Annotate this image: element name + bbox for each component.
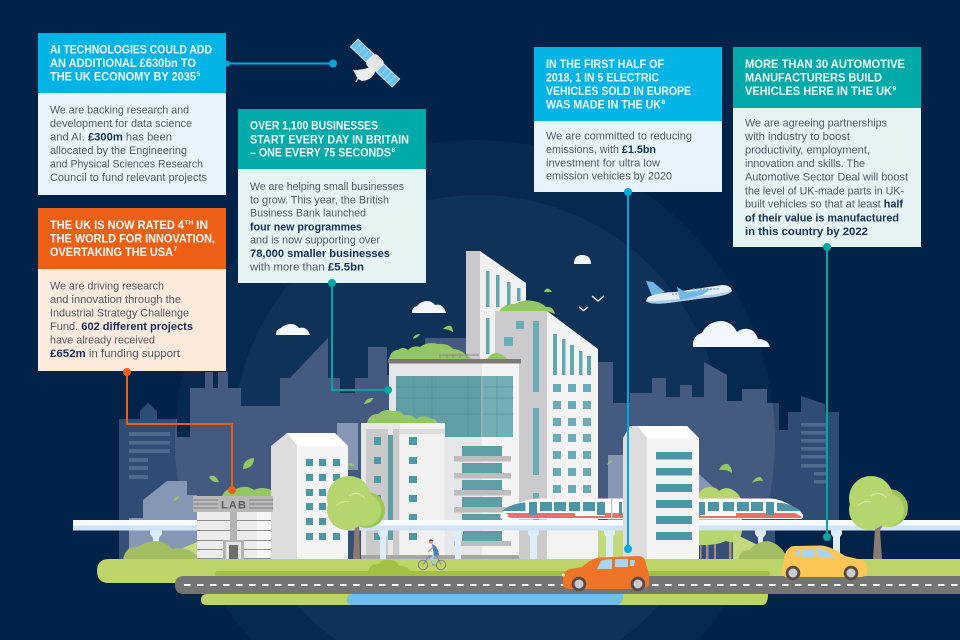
building: central glass block [388,359,521,559]
heading: innovation ranking: THE WORLD FOR INNOVATION, [50,234,215,246]
text: automotive manufacturers body: the level of UK-made parts in UK- [745,185,904,197]
text: automotive manufacturers body: of their value is manufactured [745,212,899,224]
text: innovation ranking body: £652m in funding support [50,348,180,360]
rail pillars [378,530,842,560]
text: automotive manufacturers body: with industry to boost [744,131,850,143]
text: electric vehicles body: emissions, with £1.5bn [546,144,656,156]
panel: AI technologies [38,33,226,195]
text: automotive manufacturers body: built vehicles so that at least half [745,199,903,211]
building: small left block [361,423,445,559]
heading: innovation ranking: OVERTAKING THE USA [50,247,173,259]
text: AI technologies body: We are backing research and [50,104,189,116]
heading: AI technologies: THE UK ECONOMY BY 2035 [50,72,197,84]
text: innovation ranking body: and innovation through the [50,294,181,306]
heading: electric vehicles: IN THE FIRST HALF OF [546,59,664,71]
birds [579,296,604,310]
heading: automotive manufacturers: MORE THAN 30 AUTOMOTIVE [745,59,905,71]
text: AI technologies body: and Physical Sciences Research [50,159,203,171]
text: small businesses body: 78,000 smaller businesses [250,248,390,260]
text: electric vehicles body [546,130,692,183]
text: innovation ranking body: Fund. 602 different projects [50,321,193,333]
building: right-front with bands [623,426,699,559]
cloud: left [276,324,310,335]
text: small businesses body: Business Bank launched [250,208,366,220]
text: automotive manufacturers body: in this country by 2022 [745,226,868,238]
connector: automotive card to yellow car [823,243,831,541]
text: small businesses body: and is now supporting over [250,235,380,247]
text: automotive manufacturers body: productivity, employment, [745,145,870,157]
heading: AI technologies: AN ADDITIONAL £630bn TO [50,58,196,70]
building: second tower [495,311,598,559]
rail pillars behind bushes [150,530,766,548]
icon: aeroplane [646,281,732,304]
text: electric vehicles body: We are committed to reducing [546,130,692,142]
heading: innovation ranking: IN [196,220,208,232]
text: small businesses body: with more than £5.5bn [249,262,364,274]
cloud: centre [412,301,446,313]
text: AI technologies body: allocated by the Engineering [50,145,187,157]
heading: innovation ranking: 7 [174,246,178,253]
building: LAB: LAB [221,500,246,512]
connector: electric vehicles card to orange car [624,188,632,553]
heading: small businesses [250,121,409,160]
text: AI technologies body [50,104,207,184]
ground and road [97,559,960,605]
panel: innovation ranking [38,208,226,371]
elevated railway [73,520,960,530]
heading: small businesses: START EVERY DAY IN BRITAIN [250,134,409,146]
heading: innovation ranking [50,220,215,259]
text: electric vehicles body: emission vehicles by 2020 [546,171,672,183]
heading: electric vehicles: VEHICLES SOLD IN EUROPE [546,86,691,98]
heading: AI technologies: AI TECHNOLOGIES COULD ADD [50,44,212,56]
heading: electric vehicles: 8 [662,99,666,106]
heading: AI technologies [50,44,212,84]
text: automotive manufacturers body: innovation and skills. The [745,158,865,170]
text: innovation ranking body: We are driving research [50,280,164,292]
roof bush and rail on central block [389,343,507,359]
text: automotive manufacturers body [744,117,908,238]
heading: electric vehicles [546,59,691,112]
text: innovation ranking body [50,280,193,360]
icon: satellite [349,37,401,89]
text: innovation ranking body: have already received [50,334,155,346]
building: LAB [193,487,273,559]
text: automotive manufacturers body: We are agreeing partnerships [745,117,887,129]
panel: electric vehicles [534,47,722,192]
text: AI technologies body: and AI. £300m has been [50,132,172,144]
panel: small businesses [238,109,426,283]
heading: small businesses: – ONE EVERY 75 SECONDS [250,148,391,160]
heading: automotive manufacturers: MANUFACTURERS BUILD [745,73,882,85]
skyline [119,338,839,560]
text: AI technologies body: development for data science [50,118,192,130]
connector: innovation card to LAB [123,368,236,494]
bush on small block [367,410,438,423]
cloud: right [693,321,770,347]
heading: automotive manufacturers: 9 [892,86,896,92]
panel: automotive manufacturers [733,47,921,247]
text: small businesses body: four new programmes [250,221,362,233]
bush on second tower [499,300,555,314]
car: orange [562,556,649,591]
heading: automotive manufacturers: VEHICLES HERE IN THE UK [745,86,893,98]
heading: electric vehicles: WAS MADE IN THE UK [546,100,662,112]
text: innovation ranking body: Industrial Strategy Challenge [50,307,189,319]
cloud: small top right [574,255,591,264]
heading: innovation ranking: THE UK IS NOW RATED 4 [50,220,185,232]
heading: small businesses: 6 [392,147,396,154]
connector: businesses card to central block [328,279,392,394]
text: AI technologies body: Council to fund relevant projects [50,172,207,184]
leaves [173,288,763,501]
text: automotive manufacturers body: Automotive Sector Deal will boost [745,172,908,184]
light background buildings [129,423,713,560]
car: yellow [782,546,867,580]
text: small businesses body: We are helping small businesses [250,181,404,193]
tree: right [849,476,908,559]
building: tall back tower [466,251,526,360]
connector: AI card to satellite [224,60,337,68]
heading: AI technologies: 5 [196,71,200,78]
building: white left-front [271,433,348,559]
heading: small businesses: OVER 1,100 BUSINESSES [250,121,378,133]
text: electric vehicles body: investment for ultra low [546,157,660,169]
heading: electric vehicles: 2018, 1 IN 5 ELECTRIC [546,73,659,85]
tree: left [327,476,385,559]
text: small businesses body: to grow. This year, the British [250,194,389,206]
background trees and bushes [123,487,788,560]
train [500,498,803,519]
heading: innovation ranking: TH [184,220,193,226]
heading: automotive manufacturers [745,59,905,98]
text: small businesses body [249,181,404,274]
cyclist [418,539,446,570]
